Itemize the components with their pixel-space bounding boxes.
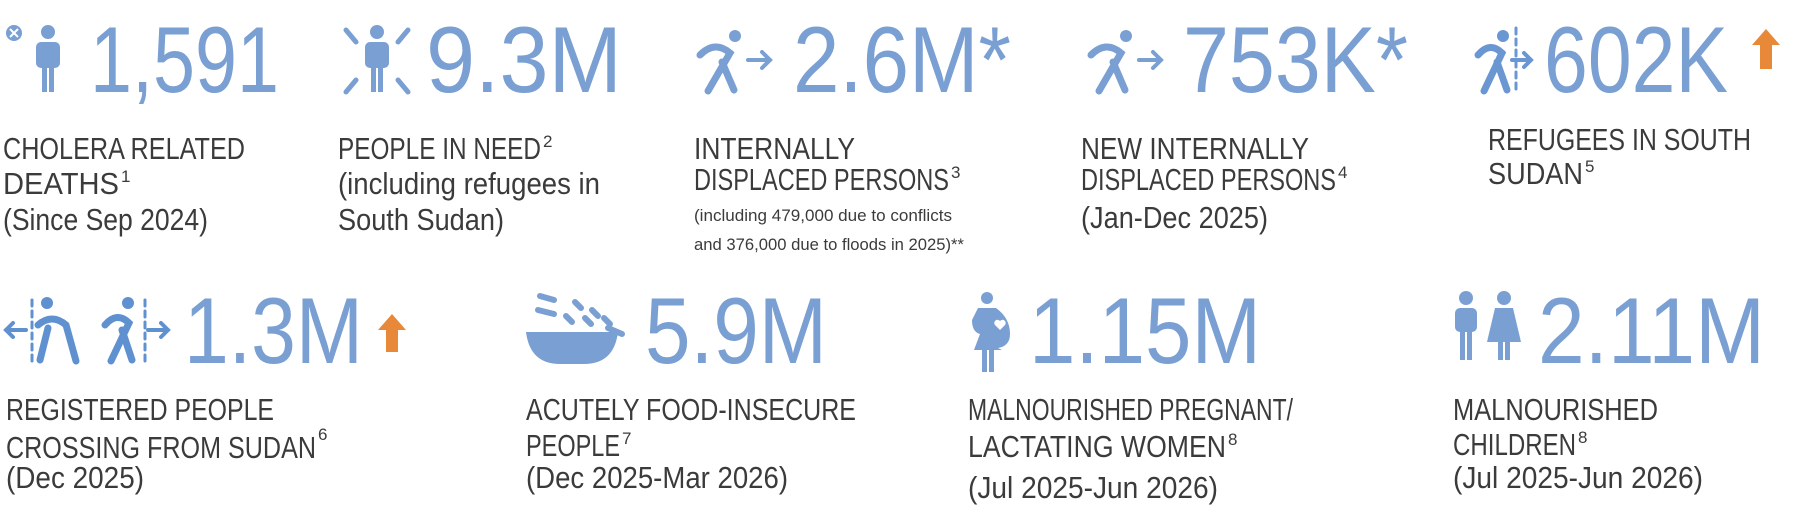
- icon: walking person arrow 2: [1091, 30, 1161, 91]
- icon: person crossing border: [1478, 28, 1531, 92]
- label: food insecure: PEOPLE: [526, 428, 620, 463]
- icon: two people crossing: [6, 297, 168, 366]
- label: IDPs: (including 479,000 due to conflicts: [694, 206, 952, 225]
- label: pregnant women: [968, 392, 1293, 505]
- label: IDPs: DISPLACED PERSONS: [694, 162, 949, 197]
- panel: pregnant women: [968, 278, 1293, 505]
- label: pregnant women: MALNOURISHED PREGNANT/: [968, 392, 1293, 427]
- number: 602K: 602K: [1544, 7, 1728, 112]
- label: food insecure: 7: [622, 429, 631, 448]
- panel: refugees: [1478, 7, 1780, 191]
- label: crossing: (Dec 2025): [6, 460, 144, 495]
- label: IDPs: INTERNALLY: [694, 131, 855, 166]
- icon: bowl of grain: [526, 296, 622, 364]
- label: new IDPs: NEW INTERNALLY: [1081, 131, 1309, 166]
- icon: walking person arrow: [700, 30, 770, 91]
- label: people in need: 2: [543, 132, 552, 151]
- label: food insecure: (Dec 2025-Mar 2026): [526, 460, 788, 495]
- panel: cholera deaths: [3, 7, 279, 237]
- label: food insecure: ACUTELY FOOD-INSECURE: [526, 392, 856, 427]
- number: 1.3M: 1.3M: [184, 278, 363, 383]
- number: 753K*: 753K*: [1183, 7, 1408, 112]
- label: refugees: REFUGEES IN SOUTH: [1488, 122, 1751, 157]
- label: refugees: SUDAN: [1488, 156, 1583, 191]
- label: IDPs: [694, 131, 964, 254]
- label: food insecure: [526, 392, 856, 495]
- panel: crossing from Sudan: [6, 278, 406, 495]
- label: children: 8: [1578, 428, 1587, 447]
- label: children: MALNOURISHED: [1453, 392, 1658, 427]
- number: 2.6M*: 2.6M*: [793, 7, 1011, 112]
- label: pregnant women: LACTATING WOMEN: [968, 429, 1226, 464]
- icon: two children: [1455, 291, 1521, 360]
- label: crossing: REGISTERED PEOPLE: [6, 392, 274, 427]
- label: IDPs: 3: [951, 163, 960, 182]
- label: people in need: South Sudan): [338, 202, 504, 237]
- label: crossing: CROSSING FROM SUDAN: [6, 430, 316, 465]
- label: cholera: 1: [121, 167, 130, 186]
- label: new IDPs: (Jan-Dec 2025): [1081, 200, 1268, 235]
- icon: orange up arrow: [378, 314, 406, 352]
- panel: food insecure: [526, 278, 856, 495]
- panel: IDPs: [694, 7, 1011, 254]
- number: 1,591: 1,591: [90, 7, 279, 112]
- number: 2.11M: 2.11M: [1538, 278, 1765, 383]
- icon: person with x: [6, 25, 60, 92]
- label: children: CHILDREN: [1453, 427, 1576, 462]
- label: IDPs: and 376,000 due to floods in 2025)**: [694, 235, 964, 254]
- number: 1.15M: 1.15M: [1029, 278, 1261, 383]
- panel: people in need: [338, 7, 622, 237]
- label: children: [1453, 392, 1703, 495]
- label: refugees: 5: [1585, 157, 1594, 176]
- label: children: (Jul 2025-Jun 2026): [1453, 460, 1703, 495]
- label: new IDPs: [1081, 131, 1347, 235]
- label: people in need: (including refugees in: [338, 166, 600, 201]
- label: refugees: [1488, 122, 1751, 191]
- label: crossing: 6: [318, 425, 327, 444]
- label: cholera: CHOLERA RELATED: [3, 131, 245, 166]
- label: pregnant women: (Jul 2025-Jun 2026): [968, 470, 1218, 505]
- label: new IDPs: DISPLACED PERSONS: [1081, 162, 1336, 197]
- label: people in need: [338, 131, 600, 237]
- panel: new IDPs: [1081, 7, 1408, 235]
- label: crossing: [6, 392, 327, 495]
- panel: children: [1453, 278, 1765, 495]
- label: cholera: (Since Sep 2024): [3, 202, 208, 237]
- number: 9.3M: 9.3M: [426, 7, 622, 112]
- label: cholera: [3, 131, 245, 237]
- icon: pregnant woman: [972, 292, 1010, 372]
- icon: person radiating: [346, 25, 408, 92]
- label: people in need: PEOPLE IN NEED: [338, 131, 541, 166]
- icon: orange up arrow: [1752, 29, 1780, 69]
- label: cholera: DEATHS: [3, 166, 119, 201]
- label: pregnant women: 8: [1228, 430, 1237, 449]
- number: 5.9M: 5.9M: [645, 278, 827, 383]
- label: new IDPs: 4: [1338, 163, 1347, 182]
